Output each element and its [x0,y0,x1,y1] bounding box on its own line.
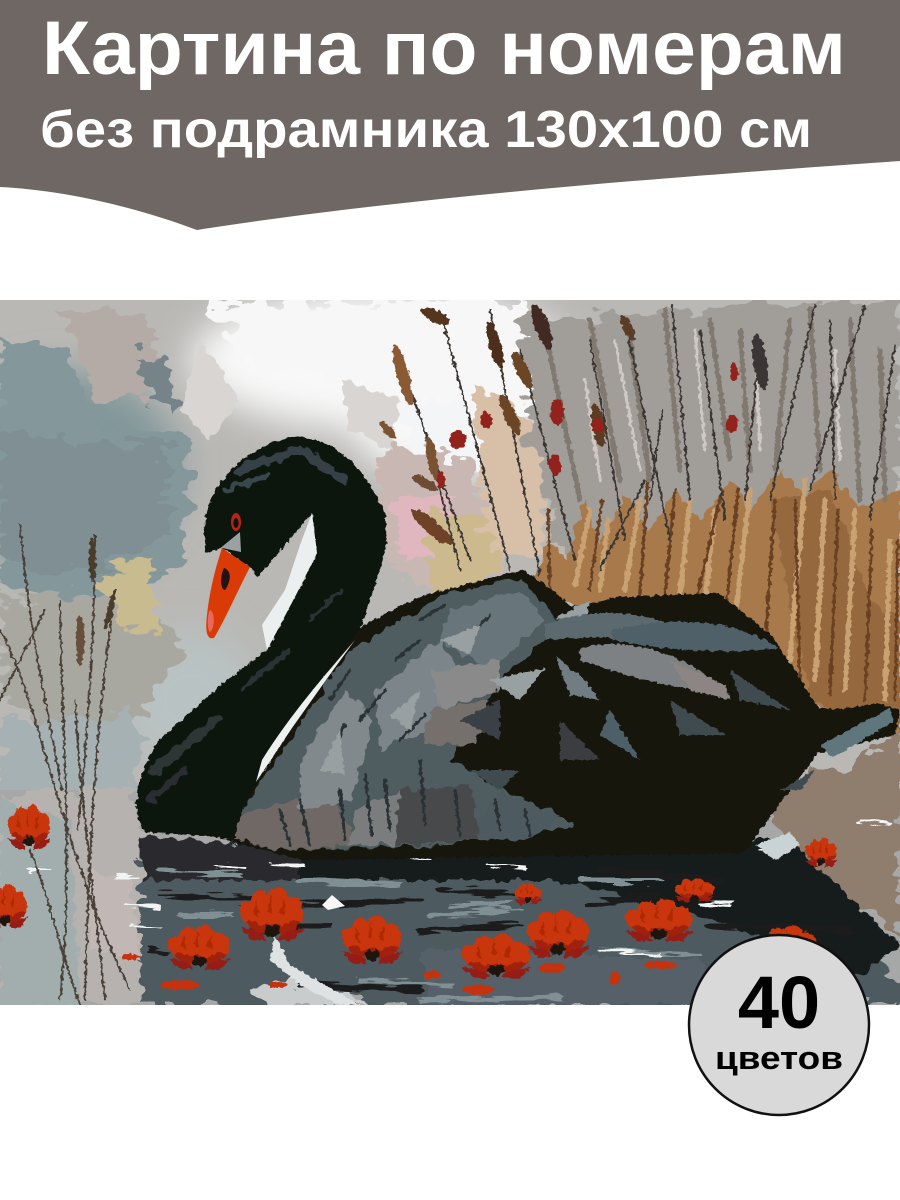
water [0,740,900,1005]
swan beak [206,548,250,638]
swan [136,437,900,860]
title: Картина по номерам [42,6,846,91]
title [40,6,846,159]
swan neck and head [136,437,386,838]
red water lilies [0,805,838,995]
badge: 40 colours [689,935,869,1115]
swan right wing feathers [460,613,893,790]
painting: black swan on a pond [0,290,900,1005]
reeds: golden thicket [378,302,900,740]
header banner background [0,0,900,230]
swan gray wing feathers [225,578,575,850]
swan dark feather shading [280,600,590,845]
subtitle: без подрамника 130х100 см [40,101,812,159]
swan neck feather texture [150,450,345,800]
painting background: misty sky [0,300,900,790]
badge: 40 colours: 40 [738,961,820,1044]
swan body [190,570,900,860]
swan eye [231,513,241,531]
left foreground stems [0,525,130,1005]
badge: 40 colours: цветов [715,1040,843,1076]
swan white neck highlight [256,513,355,782]
